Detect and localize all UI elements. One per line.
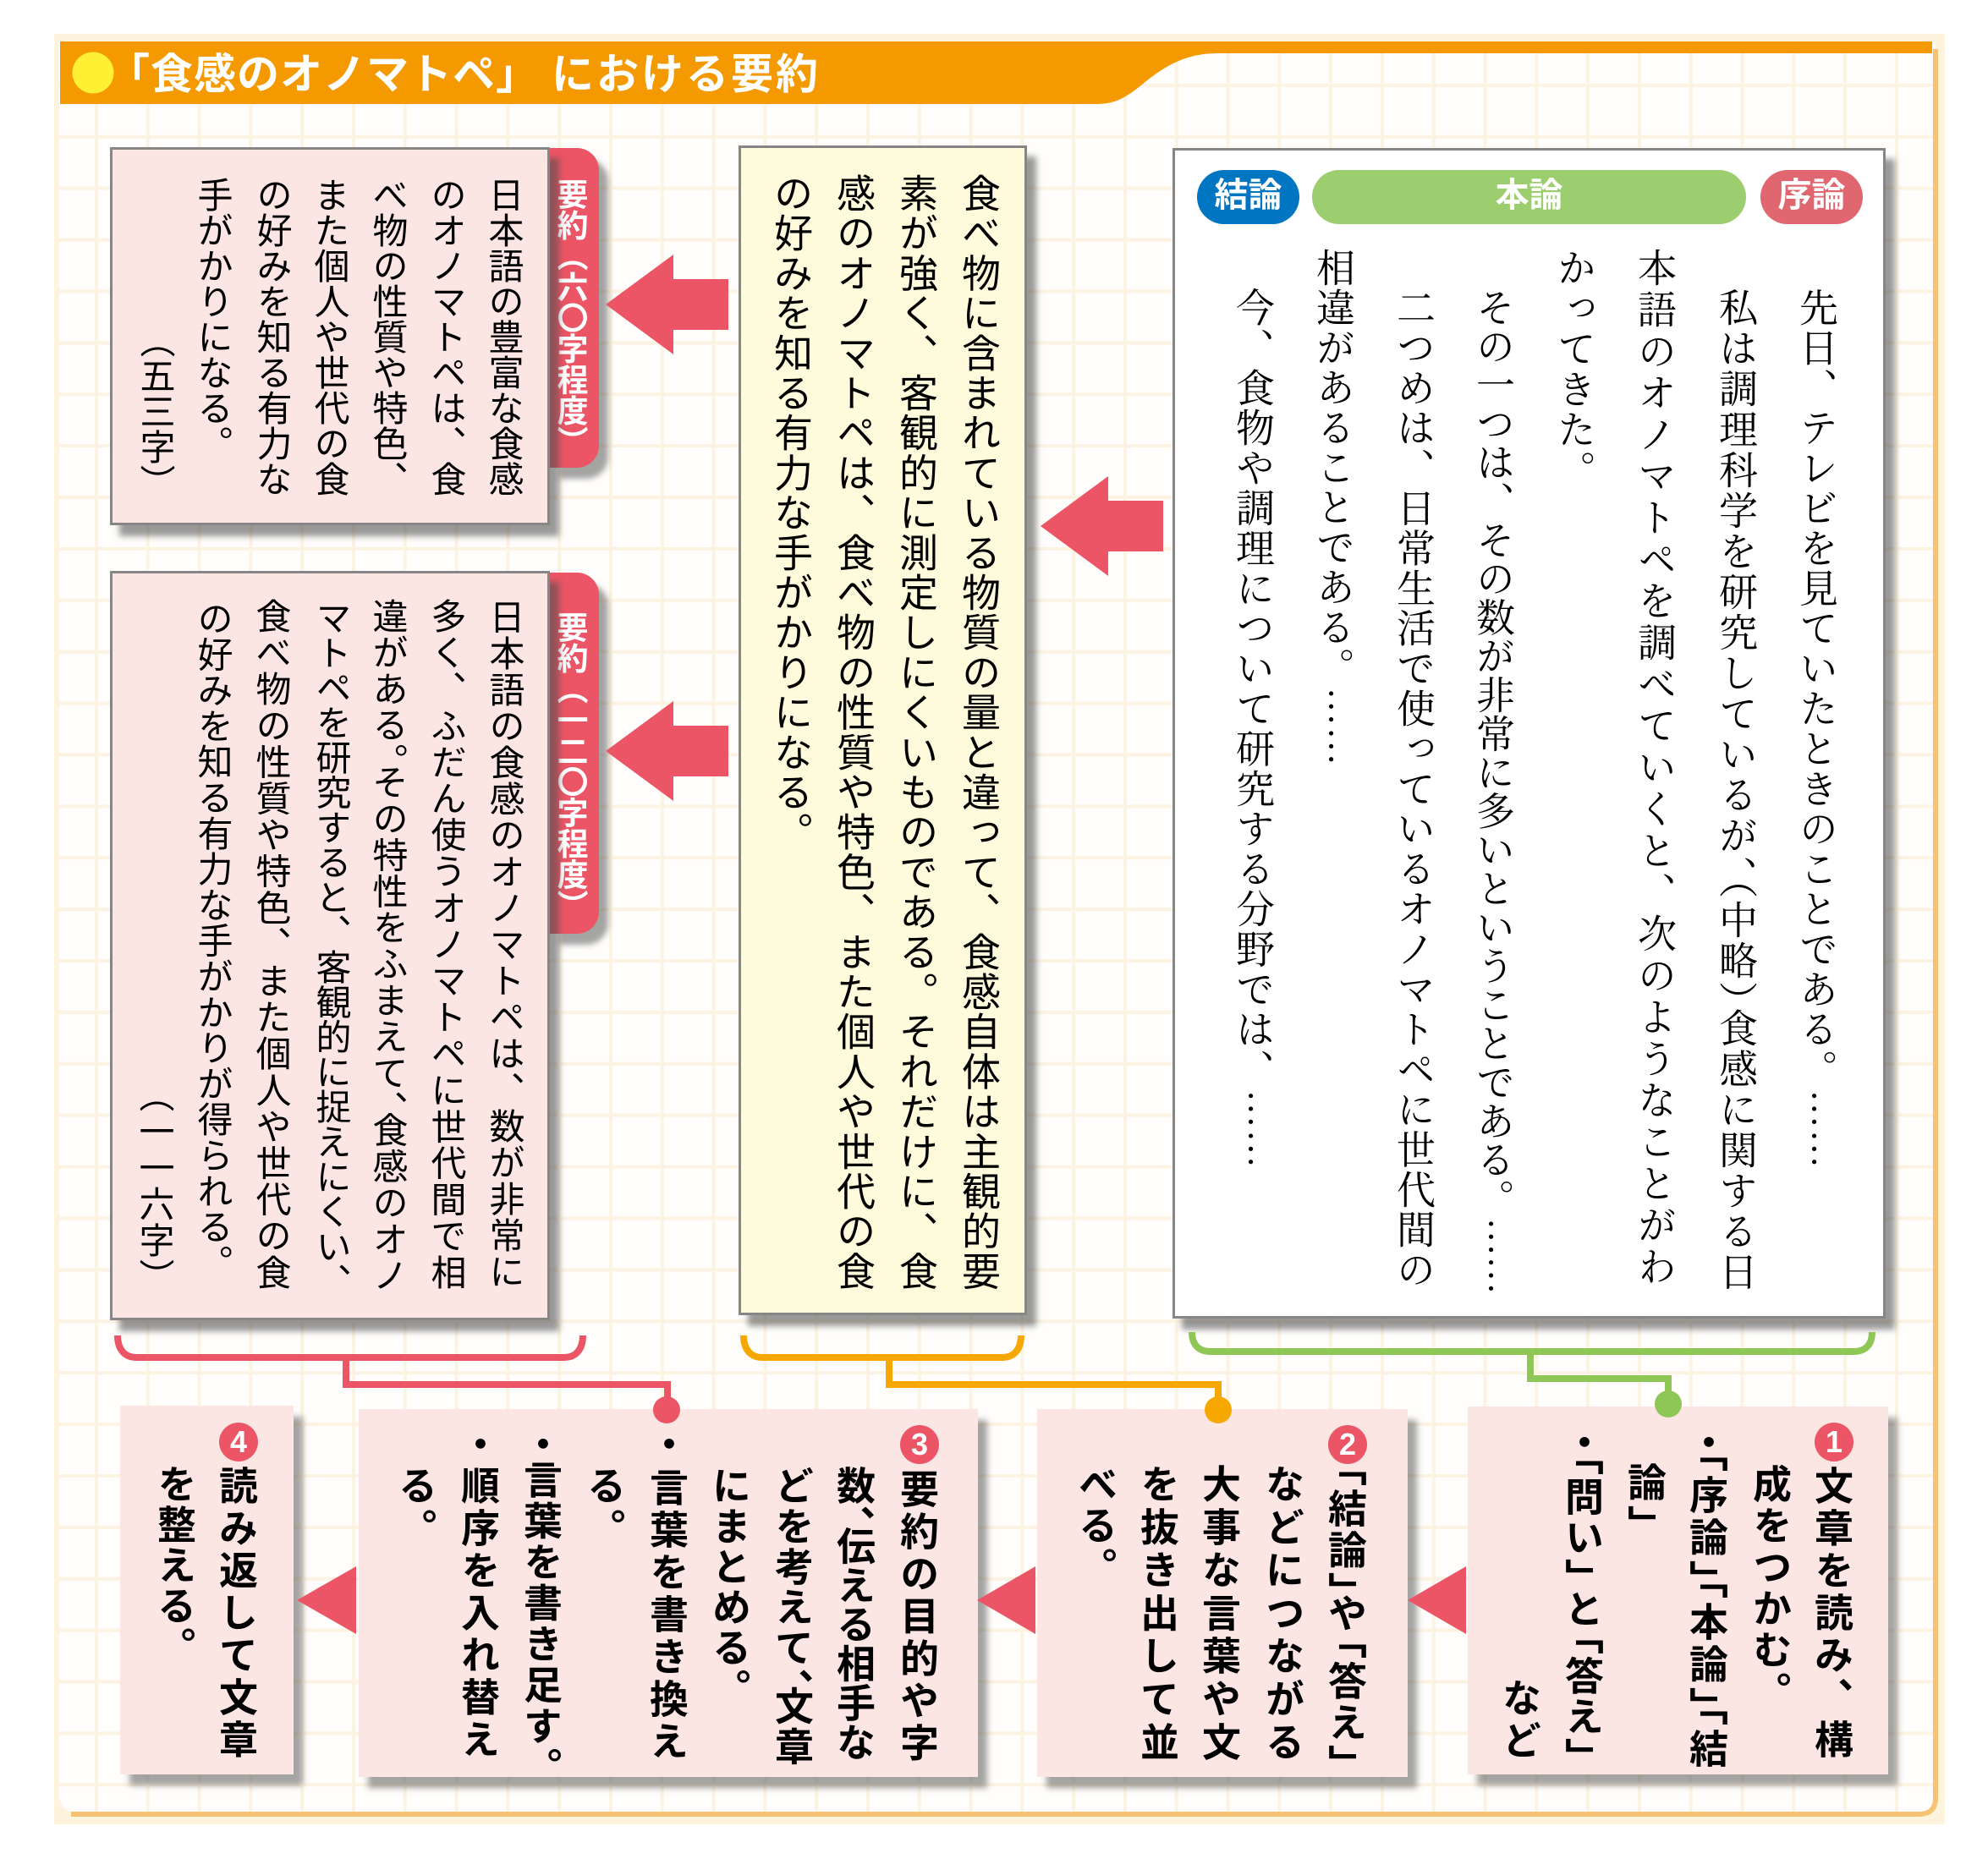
step 4 text: 読み返して文章 [214,1466,258,1762]
badge 4: 4 [230,1424,247,1459]
label: conclusion [1197,170,1299,224]
panel: 60 character summary: （五三字） [135,322,175,500]
badge 2: 2 [1339,1427,1356,1461]
arrow: paraphrase to 120 character summary [606,701,728,801]
panel: 120 character summary: の好みを知る有力な手がかりが得られる。 [193,600,233,1280]
step 3 text: 言葉を書き足す。 [519,1460,563,1788]
step 3 text: ・ [456,1424,500,1467]
badge 3 [900,1425,939,1464]
panel: 120 character summary: 食べ物の性質や特色、また個人や世代の食 [251,598,291,1291]
connector: red bracket to step 3 [118,1335,680,1423]
label: introduction: 序論 [1778,177,1846,214]
step 4 text: を整える。 [152,1464,196,1667]
passage text: 先日、テレビを見ていたときのことである。 …… [1788,288,1843,1170]
passage text: 私は調理科学を研究しているが 、（ 中略 ） 食感に関する日 [1714,288,1757,1292]
tab: 120 character summary: 要約（一二〇字程度） [552,611,587,920]
panel: step 2 [1037,1409,1408,1777]
panel: 120 character summary: マトペを研究すると、客観的に捉えにくい、 [311,600,351,1298]
icon: yellow circle [73,52,113,93]
panel: paraphrase in yellow [739,145,1027,1315]
step 3 text: 要約の目的や字 [895,1469,939,1765]
panel: 60 character summary: のオノマトペは、食 [426,177,466,496]
passage text: その一つは、その数が非常に多いということである。 …… [1464,288,1520,1295]
title: 「食感のオノマトペ」 における要約 [107,51,821,98]
triangle: step 3 to step 4 [297,1566,356,1634]
badge 1: 1 [1826,1424,1842,1459]
step 4 text [152,1464,258,1762]
step 2 text: べる。 [1074,1464,1118,1588]
panel: 60 character summary: また個人や世代の食 [310,177,349,496]
step 2 text: を抜き出して並 [1135,1464,1179,1765]
step 3 text: 数 、 伝える相手な [832,1466,876,1762]
panel: paraphrase in yellow: 食べ物に含まれている物質の量と違って、食感自体は主観的要 [957,173,1001,1291]
label: introduction [1760,170,1863,224]
panel: step 3 [359,1409,978,1777]
passage text: 本語のオノマトペを調べていくと、次のようなことがわ [1633,248,1676,1288]
panel: 60 character summary: 日本語の豊富な食感 [484,177,524,496]
step 3 text: る。 [393,1466,437,1550]
step 1 text: 文章を読み、構 [1810,1466,1853,1762]
badge 1 [1815,1423,1853,1461]
step 3 text: る。 [582,1466,626,1550]
header band [60,41,1932,104]
step 1 text: 成をつかむ。 [1748,1464,1792,1713]
step 2 text [1074,1447,1367,1785]
panel: step 4 [120,1406,294,1774]
passage text: 二つめは、日常生活で使っているオノマトペに世代間の [1392,288,1435,1290]
panel: 60 character summary [110,147,550,525]
panel: 120 character summary [110,571,550,1320]
badge 4 [219,1423,258,1461]
panel: 60 character summary: 手がかりになる。 [193,177,233,461]
step 2 text: 大事な言葉や文 [1197,1464,1241,1765]
arrow: passage to paraphrase [1041,476,1163,576]
step 3 text [393,1424,939,1788]
triangle: step 2 to step 3 [977,1566,1035,1634]
panel: paraphrase in yellow: の好みを知る有力な手がかりになる。 [769,173,813,852]
label: main body [1312,170,1746,224]
passage text: 相違があることである。 …… [1304,248,1360,767]
step 1 text [1497,1423,1853,1778]
panel: 120 character summary: 違がある 。 その特性をふまえて 、 食感のオノ [368,598,408,1293]
step 1 text: 「 序論 」「 本論 」「 結 [1684,1433,1728,1771]
badge 3: 3 [911,1427,928,1461]
step 3 text: ・ [645,1424,689,1467]
passage text: かってきた。 [1552,248,1595,491]
step 2 text: 「 結論 」 や「 答え」 [1323,1447,1367,1785]
step 3 text: ・ [519,1424,563,1467]
step 3 text: どを考えて 、 文章 [770,1466,814,1767]
step 3 text: 順序を入れ替え [456,1466,500,1762]
passage text [1224,248,1843,1295]
tab: 60 character summary [550,148,599,468]
tab: 60 character summary: 要約（六〇字程度） [552,178,587,457]
triangle: step 1 to step 2 [1408,1566,1466,1634]
panel: paraphrase in yellow: 素が強く、客観的に測定しにくいものである。それだけに、食 [894,173,938,1291]
passage text: 今、食物や調理について研究する分野では、 …… [1224,288,1280,1170]
panel: 120 character summary: （一一六字） [135,1077,174,1295]
step 1 text: ・ [1684,1423,1728,1465]
panel: original passage [1172,148,1886,1319]
panel: 120 character summary: 多く、ふだん使うオノマトペに世代間で相 [426,598,466,1291]
panel: 120 character summary: 日本語の食感のオノマトペは、数が非常に [485,599,524,1290]
connector: green bracket to step 1 [1192,1332,1872,1418]
label: main body: 本論 [1496,177,1563,214]
step 3 text: 言葉を書き換え [645,1467,689,1763]
panel: 60 character summary: べ物の性質や特色、 [368,177,408,496]
panel: paraphrase in yellow: 感のオノマトペは、食べ物の性質や特色、また個人や世代の食 [832,173,876,1291]
panel: 60 character summary: の好みを知る有力な [252,177,292,496]
tab: 120 character summary [550,573,599,934]
panel: step 1 [1468,1407,1888,1774]
step 1 text: など [1497,1678,1541,1763]
badge 2 [1328,1425,1367,1464]
step 1 text: 「 問い 」 と「 答え」 [1560,1436,1604,1778]
connector: yellow bracket to step 2 [744,1335,1232,1423]
step 1 text: ・ [1560,1423,1604,1465]
step 1 text: 論」 [1623,1462,1667,1547]
step 2 text: などにつながる [1260,1464,1304,1765]
step 3 text: にまとめる。 [707,1466,751,1708]
label: conclusion: 結論 [1215,177,1282,214]
arrow: paraphrase to 60 character summary [606,255,728,354]
